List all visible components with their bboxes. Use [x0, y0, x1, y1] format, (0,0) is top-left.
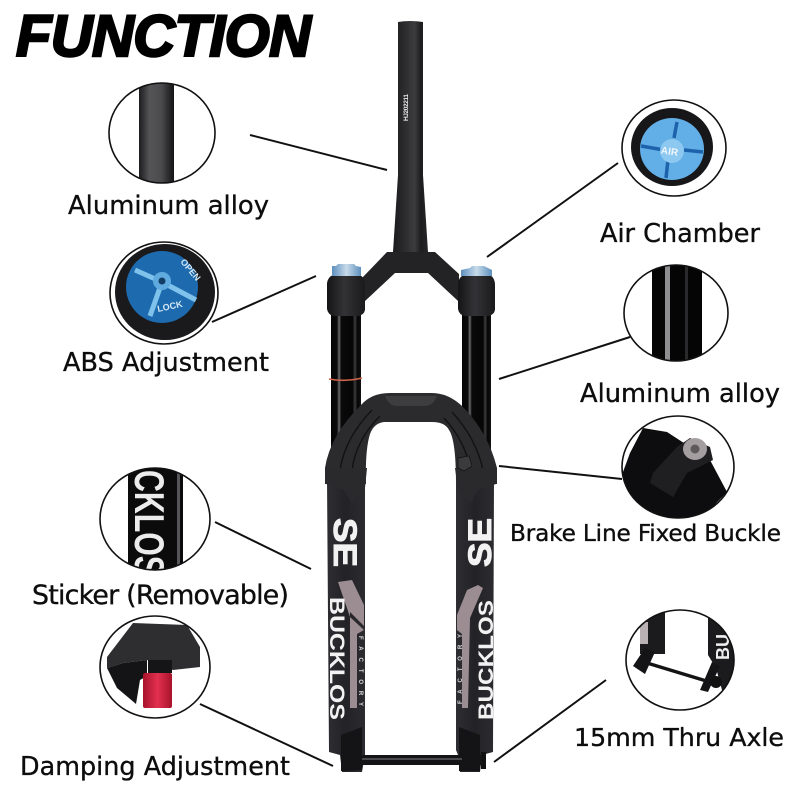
axle nut	[481, 752, 486, 769]
label: 15mm thru axle: 15mm Thru Axle	[574, 723, 784, 752]
circle: air chamber	[622, 100, 726, 196]
circle: sticker	[100, 465, 210, 576]
right graphic	[457, 585, 483, 708]
BUCKLOS right: BUCKLOS	[475, 600, 498, 720]
serial number: HJ202211	[403, 94, 410, 121]
circle: ABS adjustment	[110, 242, 218, 344]
title: FUNCTION	[16, 4, 312, 69]
right dropout	[459, 727, 480, 771]
left leg shoulder	[325, 468, 367, 504]
label: ABS adjustment: ABS Adjustment	[63, 348, 269, 378]
factory label left: FACTORY	[357, 636, 363, 706]
left top cap	[332, 264, 361, 276]
circle: damping adjustment	[100, 616, 210, 718]
steerer tube	[393, 21, 428, 252]
circle: ABS adjustment: LOCK	[156, 299, 184, 314]
label: aluminum alloy left: Aluminum alloy	[68, 191, 269, 221]
label: brake line fixed buckle: Brake Line Fixed Buckle	[510, 520, 781, 547]
arch brace	[385, 396, 437, 406]
label: aluminum alloy right: Aluminum alloy	[580, 379, 780, 409]
right lower leg	[456, 480, 494, 772]
BUCKLOS left: BUCKLOS	[325, 597, 348, 720]
lower arch	[325, 393, 497, 484]
SE decal right: SE	[462, 518, 498, 567]
label: sticker: Sticker (Removable)	[32, 580, 289, 611]
leader lines	[200, 135, 630, 766]
right top cap	[461, 266, 492, 276]
suspension fork	[325, 21, 498, 772]
left crown head	[327, 275, 365, 316]
o-ring	[329, 378, 362, 380]
right upper tube	[462, 314, 491, 474]
label: air chamber: Air Chamber	[600, 219, 761, 249]
left upper tube	[331, 314, 361, 474]
circle: thru axle: BU	[713, 634, 733, 660]
left dropout	[341, 727, 362, 771]
circle: brake line fixed buckle	[620, 416, 734, 520]
left graphic	[338, 580, 364, 708]
crown	[362, 252, 459, 302]
label: damping adjustment: Damping Adjustment	[20, 751, 290, 781]
circle: aluminum alloy steerer	[109, 82, 215, 186]
right crown head	[458, 275, 495, 316]
brake line buckle	[458, 456, 472, 471]
thru axle	[360, 755, 484, 765]
SE decal left: SE	[327, 518, 363, 567]
right leg shoulder	[455, 468, 497, 504]
circle: ABS adjustment: OPEN	[178, 257, 203, 283]
circle: air chamber: AIR	[660, 146, 679, 159]
left lower leg	[327, 480, 365, 772]
circle: aluminum alloy tube	[624, 262, 728, 364]
factory label right: FACTORY	[458, 634, 464, 704]
circle: sticker: CKLOS	[126, 470, 173, 576]
circle: thru axle	[626, 608, 735, 710]
